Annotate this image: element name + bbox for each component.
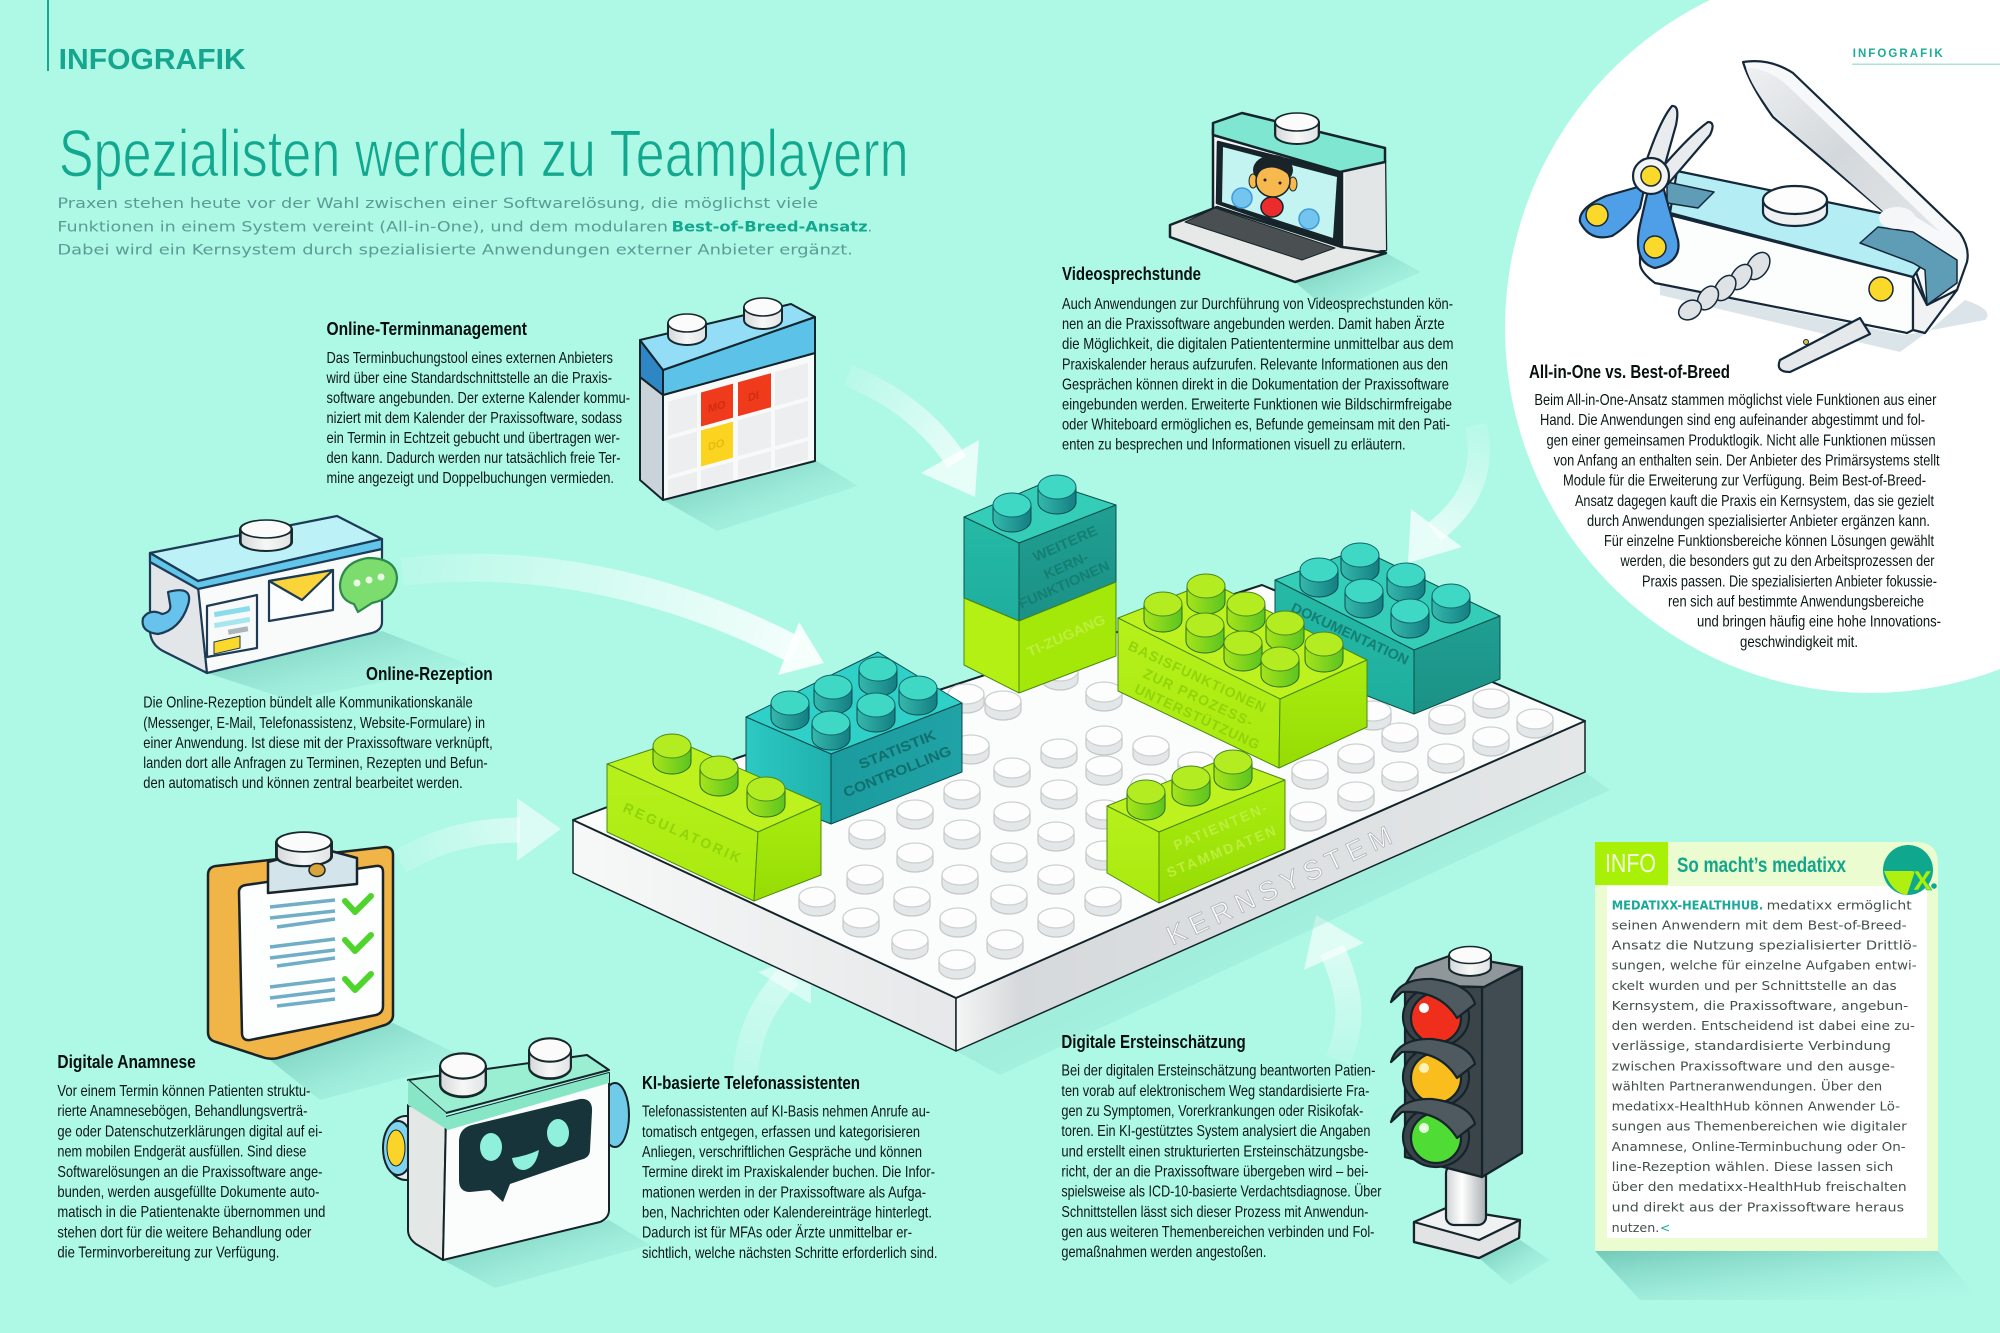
intro text: Dabei wird ein Kernsystem durch spezialisierte Anwendungen externer Anbieter ergänzt. (57, 242, 853, 258)
label: Statistik Controlling (841, 727, 954, 800)
text: Videosprechstunde: eingebunden werden. Erweiterte Funktionen wie Bildschirmfreigabe (1062, 396, 1452, 414)
text: All-in-One vs. Best-of-Breed (1534, 392, 1941, 651)
text: Videosprechstunde: enten zu besprechen und Informationen visuell zu erläutern. (1062, 437, 1406, 454)
logo: x (1913, 857, 1932, 898)
text: All-in-One vs. Best-of-Breed: Module für die Erweiterung zur Verfügung. Beim Best-of-Breed- (1563, 473, 1926, 490)
text: Digitale Anamnese: Vor einem Termin können Patienten struktu- (57, 1083, 310, 1100)
text: Digitale Anamnese: bunden, werden ausgefüllte Dokumente auto- (57, 1184, 319, 1201)
text: Online-Rezeption (143, 695, 493, 792)
box text: Ansatz die Nutzung spezialisierter Drittlö- (1612, 939, 1917, 953)
box text (1612, 898, 1917, 1235)
label: Weitere Kernfunktionen: KERN- (1041, 548, 1091, 582)
icon: pocket knife (1580, 61, 1988, 372)
box text: wählten Partneranwendungen. Über den (1612, 1078, 1882, 1094)
text: KI-basierte Telefonassistenten: ben, Nachrichten oder Kalendereinträge hinterlegt. (642, 1204, 932, 1222)
label: Basisfunktionen: UNTERSTÜTZUNG (1132, 680, 1262, 753)
box text: den werden. Entscheidend ist dabei eine zu- (1612, 1019, 1915, 1033)
block: Patientenstammdaten (1107, 750, 1285, 903)
heading: Digitale Anamnese: Digitale Anamnese (57, 1051, 196, 1072)
base (1414, 1208, 1520, 1258)
text: Online-Terminmanagement: software angebunden. Der externe Kalender kommu- (326, 390, 630, 407)
arrow: clipboard to plate (400, 798, 561, 862)
intro text: . (868, 220, 872, 236)
text: Online-Terminmanagement: ein Termin in Echtzeit gebucht und übertragen wer- (326, 430, 620, 447)
label: Patientenstammdaten: PATIENTEN- (1171, 799, 1269, 853)
text: Videosprechstunde: oder Whiteboard ermöglichen es, Befunde gemeinsam mit den Pati- (1062, 417, 1450, 434)
building-block platform (573, 475, 1610, 1075)
face (1249, 155, 1297, 197)
text: Videosprechstunde (1062, 296, 1454, 454)
text: Digitale Ersteinschätzung: und erstellt einen strukturierten Ersteinschätzungsbe- (1061, 1143, 1368, 1160)
label: Regulatorik: REGULATORIK (621, 799, 743, 866)
logo (1883, 845, 1937, 898)
box text: ckelt wurden und per Schnittstelle an das (1612, 979, 1897, 993)
text: Digitale Anamnese: stehen dort für die weitere Behandlung oder (57, 1224, 312, 1241)
text: Digitale Anamnese: matisch in die Patientenakte übernommen und (57, 1204, 325, 1221)
box text: verlässige, standardisierte Verbindung (1612, 1039, 1891, 1053)
box text: Kernsystem, die Praxissoftware, angebun- (1612, 999, 1908, 1013)
text: Digitale Ersteinschätzung (1061, 1063, 1382, 1261)
arrows (400, 375, 1479, 1090)
title: Spezialisten werden zu Teamplayern (59, 117, 909, 192)
text: Digitale Ersteinschätzung: gen aus weiteren Themenbereichen verbinden und Fol- (1061, 1224, 1374, 1241)
arrow: video to blocks (1408, 425, 1479, 563)
pivot peg (1763, 186, 1827, 226)
icon: clipboard (208, 832, 470, 1100)
top-left vertical rule (47, 0, 49, 71)
text: Digitale Ersteinschätzung: ten vorab auf elektronischem Weg standardisierte Fra- (1061, 1083, 1369, 1100)
text: Online-Rezeption: einer Anwendung. Ist diese mit der Praxissoftware verknüpft, (143, 735, 493, 752)
chat bubble (340, 558, 397, 612)
heading: Digitale Ersteinschätzung: Digitale Ersteinschätzung (1061, 1031, 1246, 1052)
blade (1743, 61, 1968, 305)
intro text: Praxen stehen heute vor der Wahl zwischen einer Softwarelösung, die möglichst viele (57, 196, 818, 212)
box text: line-Rezeption wählen. Diese lassen sich (1612, 1160, 1893, 1174)
yellow lamp (1391, 1039, 1475, 1107)
icon: video laptop (1170, 113, 1421, 312)
text: Online-Terminmanagement: den kann. Dadurch werden nur tatsächlich freie Ter- (326, 450, 620, 467)
label: Basisfunktionen: BASISFUNKTIONEN (1126, 638, 1268, 715)
block: Weitere Kernfunktionen and TI-Zugang tower (964, 475, 1116, 693)
block: Basisfunktionen (1118, 574, 1367, 768)
text: Online-Rezeption: den automatisch und können zentral bearbeitet werden. (143, 775, 463, 792)
text: Digitale Ersteinschätzung: Schnittstellen lässt sich dieser Prozess mit Anwendun- (1061, 1204, 1368, 1221)
envelope (269, 570, 333, 621)
text: KI-basierte Telefonassistenten: mationen werden in der Praxissoftware als Aufga- (642, 1184, 926, 1201)
box title: So macht’s medatixx (1677, 854, 1846, 877)
text: Online-Terminmanagement: wird über eine Standardschnittstelle an die Praxis- (326, 370, 612, 387)
heading: Videosprechstunde: Videosprechstunde (1062, 263, 1201, 284)
text: KI-basierte Telefonassistenten (642, 1104, 938, 1262)
box text: nutzen. (1612, 1221, 1659, 1235)
block: Regulatorik (607, 734, 821, 901)
intro text: Funktionen in einem System vereint (All-in-One), und dem modularen (57, 220, 668, 236)
text: KI-basierte Telefonassistenten: tomatisch entgegen, erfassen und kategorisieren (642, 1124, 920, 1141)
text: All-in-One vs. Best-of-Breed: und bringen häufig eine hohe Innovations- (1697, 614, 1941, 631)
text: Digitale Ersteinschätzung: Bei der digitalen Ersteinschätzung beantworten Patien- (1061, 1063, 1375, 1080)
checklist lines (270, 900, 335, 1006)
text: KI-basierte Telefonassistenten: sichtlich, welche nächsten Schritte erforderlich sind. (642, 1245, 938, 1262)
label: Basisfunktionen: ZUR PROZESS- (1141, 665, 1256, 730)
text: Online-Terminmanagement: mine angezeigt und Doppelbuchungen vermieden. (326, 470, 614, 487)
heading: Online-Terminmanagement: Online-Terminmanagement (326, 318, 527, 339)
block: Dokumentation (1275, 543, 1500, 714)
text: KI-basierte Telefonassistenten: Dadurch ist für MFAs oder Ärzte unmittelbar er- (642, 1224, 912, 1242)
text: Online-Terminmanagement: Das Terminbuchungstool eines externen Anbieters (326, 350, 613, 367)
icon: robot (383, 1038, 650, 1288)
label: Weitere Kernfunktionen (1016, 522, 1112, 612)
box text: seinen Anwendern mit dem Best-of-Breed- (1612, 918, 1907, 932)
label: Kernsystem: KERNSYSTEM (1162, 820, 1397, 951)
text: Digitale Ersteinschätzung: spielsweise als ICD-10-basierte Verdachtsdiagnose. Über (1061, 1183, 1382, 1201)
box body (1607, 886, 1927, 1238)
label: Dokumentation: DOKUMENTATION (1289, 599, 1411, 668)
arrow: reception to blocks (402, 568, 824, 675)
text: All-in-One vs. Best-of-Breed: ren sich auf bestimmte Anwendungsbereiche (1668, 594, 1924, 610)
box text: medatixx ermöglicht (1767, 898, 1912, 912)
text: Digitale Anamnese: nem mobilen Endgerät ausfüllen. Sind diese (57, 1144, 306, 1161)
text: Videosprechstunde: nen an die Praxissoftware angebunden werden. Damit haben Ärzte (1062, 315, 1445, 333)
text: KI-basierte Telefonassistenten: Termine direkt im Praxiskalender buchen. Die Infor- (642, 1164, 935, 1181)
arrow: traffic light to plate (1304, 915, 1364, 1060)
label: Statistik Controlling: STATISTIK (856, 727, 938, 772)
white circle panel (1505, 0, 2000, 693)
box text: und direkt aus der Praxissoftware heraus (1612, 1200, 1904, 1214)
top-right kicker: INFOGRAFIK (1853, 48, 1943, 60)
plate shadow (956, 772, 1610, 1075)
text: Digitale Ersteinschätzung: gen zu Symptomen, Vorerkrankungen oder Risikofak- (1061, 1103, 1363, 1120)
label: Patientenstammdaten: STAMMDATEN (1164, 822, 1278, 881)
heading: KI-basierte Telefonassistenten: KI-basierte Telefonassistenten (642, 1072, 860, 1093)
body (1640, 215, 1913, 333)
text: KI-basierte Telefonassistenten: Telefonassistenten auf KI-Basis nehmen Anrufe au- (642, 1104, 930, 1121)
plate studs (799, 661, 1553, 979)
green lamp (1391, 1099, 1475, 1167)
text: Videosprechstunde: Praxiskalender heraus aufzurufen. Relevante Informationen aus den (1062, 356, 1448, 373)
box text: MEDATIXX-HEALTHHUB. (1612, 898, 1763, 912)
text: Digitale Anamnese: rierte Anamnesebögen, Behandlungsverträ- (57, 1103, 307, 1120)
icon: calendar: DO (708, 437, 725, 454)
text: All-in-One vs. Best-of-Breed: geschwindigkeit mit. (1740, 634, 1858, 651)
text: Digitale Ersteinschätzung: toren. Ein KI-gestütztes System analysiert die Angaben (1061, 1123, 1370, 1140)
text: Online-Rezeption: Die Online-Rezeption bündelt alle Kommunikationskanäle (143, 695, 473, 712)
box text: < (1660, 1221, 1670, 1235)
text: Online-Terminmanagement (326, 350, 630, 487)
text: Videosprechstunde: die Möglichkeit, die digitalen Patiententermine unmittelbar aus dem (1062, 336, 1454, 353)
label: TI-Zugang: TI-ZUGANG (1024, 611, 1108, 660)
housing (1482, 968, 1522, 1177)
tool stack (1860, 227, 1957, 305)
text: Digitale Anamnese: ge oder Datenschutzerklärungen digital auf ei- (57, 1123, 322, 1140)
intro text: Best-of-Breed-Ansatz (672, 220, 868, 236)
block: Statistik Controlling (746, 652, 962, 824)
heading: Online-Rezeption: Online-Rezeption (366, 663, 493, 684)
icon: traffic light (1391, 946, 1550, 1285)
box text: zwischen Praxissoftware und den ausge- (1612, 1059, 1895, 1073)
text: Online-Rezeption: (Messenger, E-Mail, Telefonassistenz, Website-Formulare) in (143, 715, 485, 732)
check marks (345, 896, 371, 990)
text: Digitale Ersteinschätzung: richt, der an die Praxissoftware übergeben wird – bei- (1061, 1164, 1368, 1180)
scissors (1580, 106, 1713, 268)
box text: Anamnese, Online-Terminbuchung oder On- (1612, 1140, 1906, 1154)
text: Online-Terminmanagement: niziert mit dem Kalender der Praxissoftware, sodass (326, 410, 622, 427)
plate (573, 585, 1585, 1051)
box frame (1595, 842, 1938, 1251)
box text: sungen, welche für einzelne Aufgaben entwi- (1612, 959, 1917, 973)
kicker: INFOGRAFIK: INFOGRAFIK (59, 44, 246, 76)
box text: über den medatixx-HealthHub freischalten (1612, 1180, 1907, 1194)
icon: calendar (640, 298, 858, 531)
text: Online-Rezeption: landen dort alle Anfragen zu Terminen, Rezepten und Befun- (143, 755, 488, 772)
phone (143, 590, 189, 634)
icon: calendar: MO (708, 399, 726, 416)
icon: calendar: DI (748, 390, 759, 404)
text: Digitale Anamnese: Softwarelösungen an die Praxissoftware ange- (57, 1164, 322, 1181)
text: Digitale Anamnese (57, 1083, 325, 1262)
label: Basisfunktionen (1126, 638, 1268, 753)
corkscrew (1675, 248, 1775, 324)
text: Videosprechstunde: Gesprächen können direkt in die Dokumentation der Praxissoftware (1062, 376, 1449, 393)
arrow: calendar to blocks (848, 375, 979, 497)
box text: medatixx-HealthHub können Anwender Lö- (1612, 1100, 1900, 1114)
label: Weitere Kernfunktionen: WEITERE (1030, 522, 1100, 565)
INFO label: INFO (1605, 848, 1656, 878)
label: Statistik Controlling: CONTROLLING (841, 742, 954, 800)
info box (1595, 842, 1980, 1300)
knife shadow (1660, 285, 1988, 352)
label: Weitere Kernfunktionen: FUNKTIONEN (1016, 557, 1112, 612)
text: Digitale Ersteinschätzung: gemaßnahmen werden angestoßen. (1061, 1244, 1266, 1261)
box text: sungen aus Themenbereichen wie digitaler (1612, 1120, 1908, 1134)
small tool (1779, 318, 1870, 372)
icon: online reception (143, 516, 470, 700)
box shadow (1595, 1251, 1980, 1300)
INFO label (1595, 842, 1668, 885)
arrow: robot to plate (745, 954, 811, 1090)
text: KI-basierte Telefonassistenten: Anliegen, verschriftlichen Gespräche und können (642, 1144, 922, 1161)
text: Digitale Anamnese: die Terminvorbereitung zur Verfügung. (57, 1245, 279, 1262)
red lamp (1391, 979, 1475, 1047)
heading: All-in-One vs. Best-of-Breed: All-in-One vs. Best-of-Breed (1529, 361, 1730, 382)
intro text (57, 196, 872, 258)
text: Videosprechstunde: Auch Anwendungen zur Durchführung von Videosprechstunden kön- (1062, 296, 1453, 313)
